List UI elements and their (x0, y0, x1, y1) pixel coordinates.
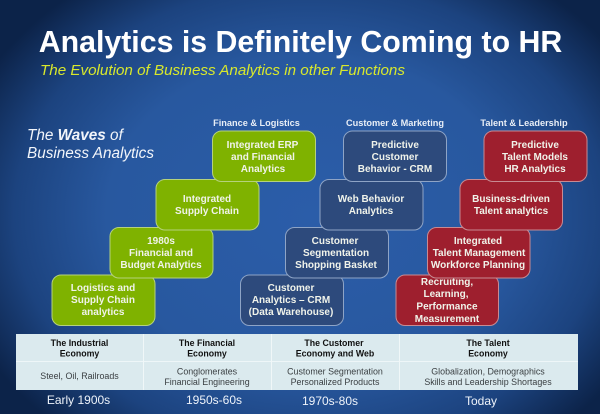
box: predictive customer behavior: Customer (372, 152, 418, 163)
column: talent economy: Skills and Leadership Shortages (424, 377, 552, 387)
box: logistics and supply chain analytics: analytics (82, 307, 125, 318)
box: customer analytics crm: Customer (268, 283, 314, 294)
box: predictive customer behavior: Behavior - CRM (358, 164, 432, 175)
box: customer analytics crm: Analytics – CRM (252, 295, 330, 306)
column: customer economy: Customer Segmentation (287, 366, 383, 376)
box: financial and budget analytics: Financial and (129, 248, 193, 259)
column: customer economy: Personalized Products (291, 377, 380, 387)
box: customer analytics crm: (Data Warehouse) (249, 307, 333, 318)
box: customer segmentation: Shopping Basket (295, 260, 378, 271)
box: predictive talent models: Predictive (511, 140, 559, 151)
green wave: finance and logistics (52, 131, 316, 326)
box: recruiting learning performance: Measurement (415, 314, 480, 325)
box: predictive talent models (484, 131, 587, 182)
waves label: Business Analytics (27, 145, 154, 162)
box: predictive talent models: HR Analytics (504, 164, 566, 175)
column: financial economy (164, 338, 250, 387)
era label: 1950s-60s: 1950s-60s (186, 393, 242, 407)
column: customer economy: The Customer (304, 338, 364, 348)
box: integrated talent management: Talent Management (433, 248, 526, 259)
column: talent economy: Globalization, Demographics (431, 366, 545, 376)
column: customer economy: Economy and Web (296, 348, 375, 358)
subtitle: The Evolution of Business Analytics in other Functions (40, 62, 405, 79)
box: integrated supply chain: Supply Chain (175, 206, 239, 217)
column: talent economy: Economy (468, 348, 508, 358)
box: financial and budget analytics (110, 228, 213, 278)
box: business-driven talent analytics: Business-driven (472, 194, 550, 205)
box: logistics and supply chain analytics: Logistics and (71, 283, 135, 294)
red wave: talent and leadership (396, 131, 587, 326)
box: financial and budget analytics: 1980s (147, 236, 175, 247)
box: logistics and supply chain analytics: Supply Chain (71, 295, 135, 306)
box: integrated erp: Integrated ERP (227, 140, 299, 151)
box: business-driven talent analytics (460, 180, 562, 230)
box: integrated talent management: Integrated (454, 236, 502, 247)
column: talent economy: The Talent (466, 338, 510, 348)
box: recruiting learning performance: Recruiting, (421, 277, 473, 288)
box: integrated erp: Analytics (241, 164, 286, 175)
title: Analytics is Definitely Coming to HR (39, 26, 562, 59)
column: industrial economy: The Industrial (51, 338, 108, 348)
economy table (16, 334, 578, 390)
box: logistics and supply chain analytics (52, 275, 155, 326)
column: industrial economy: Economy (60, 348, 99, 358)
box: customer segmentation: Segmentation (303, 248, 369, 259)
box: predictive customer behavior (344, 131, 446, 182)
box: integrated erp: and Financial (231, 152, 295, 163)
box: customer segmentation (286, 228, 388, 278)
column: financial economy: Economy (187, 348, 227, 358)
box: business-driven talent analytics: Talent analytics (474, 206, 549, 217)
box: recruiting learning performance (396, 275, 498, 326)
box: web behavior analytics: Analytics (349, 206, 394, 217)
box: customer analytics crm (240, 275, 344, 326)
column heading: finance and logistics: Finance & Logistics (213, 118, 300, 128)
box: integrated supply chain: Integrated (183, 194, 231, 205)
box: financial and budget analytics: Budget Analytics (120, 260, 202, 271)
box: integrated talent management (428, 228, 530, 278)
navy wave: customer and marketing (240, 131, 446, 326)
column: industrial economy: Steel, Oil, Railroads (40, 371, 119, 381)
era label: 1970s-80s: 1970s-80s (302, 394, 358, 408)
column: customer economy (287, 338, 383, 387)
box: recruiting learning performance: Learning, (423, 289, 469, 300)
column heading: customer and marketing: Customer & Marketing (346, 118, 444, 128)
column heading: talent and leadership: Talent & Leadership (480, 118, 568, 128)
box: predictive customer behavior: Predictive (371, 140, 419, 151)
box: predictive talent models: Talent Models (502, 152, 568, 163)
box: customer segmentation: Customer (312, 236, 358, 247)
column: financial economy: Conglomerates (177, 366, 238, 376)
column: industrial economy (40, 338, 119, 381)
box: integrated talent management: Workforce Planning (431, 260, 525, 271)
box: integrated erp (212, 131, 316, 182)
column: financial economy: Financial Engineering (164, 377, 250, 387)
box: integrated supply chain (156, 180, 259, 230)
era label: early 1900s: Early 1900s (47, 393, 110, 407)
waves label (27, 127, 154, 162)
column: talent economy (424, 338, 552, 387)
box: recruiting learning performance: Performance (416, 302, 478, 312)
waves label: The Waves of (27, 127, 125, 144)
column: financial economy: The Financial (179, 338, 235, 348)
box: web behavior analytics (320, 180, 423, 230)
box: web behavior analytics: Web Behavior (338, 194, 404, 205)
era label: today: Today (465, 394, 497, 408)
